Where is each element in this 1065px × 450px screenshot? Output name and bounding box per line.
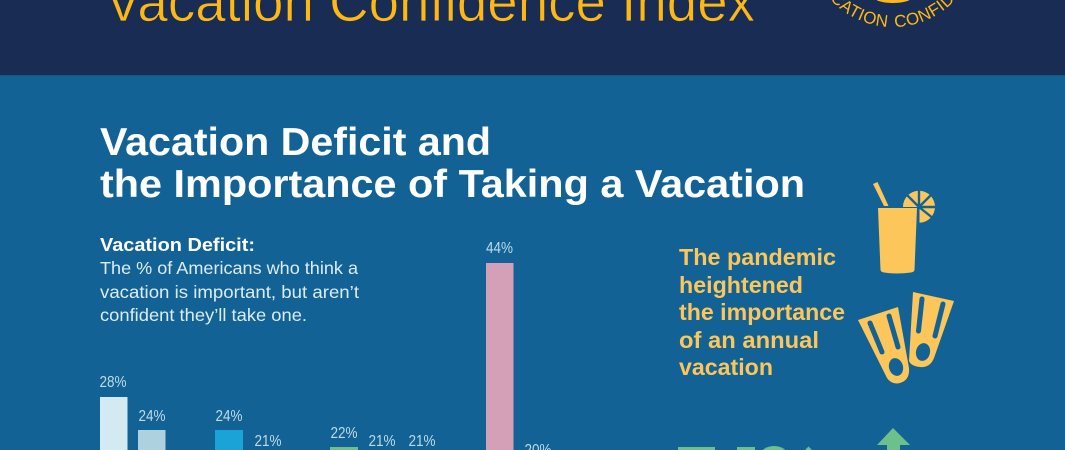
label 21% green group first: 21% [368, 433, 396, 450]
bar 24% light [138, 408, 166, 450]
green figure, cropped: only the top edge of its glyphs is visible [678, 446, 812, 450]
section heading: the Importance of Taking a Vacation [100, 163, 805, 206]
vacation deficit description [100, 235, 359, 325]
pandemic callout text [679, 244, 845, 380]
label 21% blue group: 21% [254, 433, 282, 450]
pandemic callout text: vacation [679, 354, 773, 380]
icon: drink glass with straw and citrus slice [873, 182, 937, 274]
left fin [858, 307, 909, 383]
bar 24% light: 24% [138, 408, 166, 425]
bar chart: vacation deficit [100, 240, 552, 450]
bar 22% green: 22% [330, 425, 358, 442]
pandemic callout text: The pandemic [679, 244, 836, 270]
label 21% green group second: 21% [408, 433, 436, 450]
section heading: Vacation Deficit and [100, 121, 491, 164]
icon: up arrow, cropped [877, 428, 910, 450]
bar 24% blue [215, 408, 243, 450]
vacation deficit description: vacation is important, but aren’t [100, 282, 359, 302]
vacation deficit description: confident they’ll take one. [100, 305, 307, 325]
right fin [909, 292, 954, 367]
bar 24% blue: 24% [216, 408, 243, 425]
pandemic callout text: of an annual [679, 327, 819, 353]
bar 44% pink: 44% [486, 240, 513, 257]
header band [0, 0, 1065, 76]
bar 28% [100, 374, 128, 450]
pandemic callout text: the importance [679, 299, 845, 325]
icon: swim fins [858, 292, 954, 383]
vacation deficit description: Vacation Deficit: [100, 235, 255, 255]
seal emblem, cropped by top edge [832, 0, 952, 27]
pandemic callout text: heightened [679, 272, 803, 298]
bar 28%: 28% [100, 374, 127, 391]
bar 22% green [330, 425, 358, 450]
vacation deficit description: The % of Americans who think a [100, 258, 358, 278]
bar 44% pink [486, 240, 514, 450]
section heading [100, 121, 805, 206]
